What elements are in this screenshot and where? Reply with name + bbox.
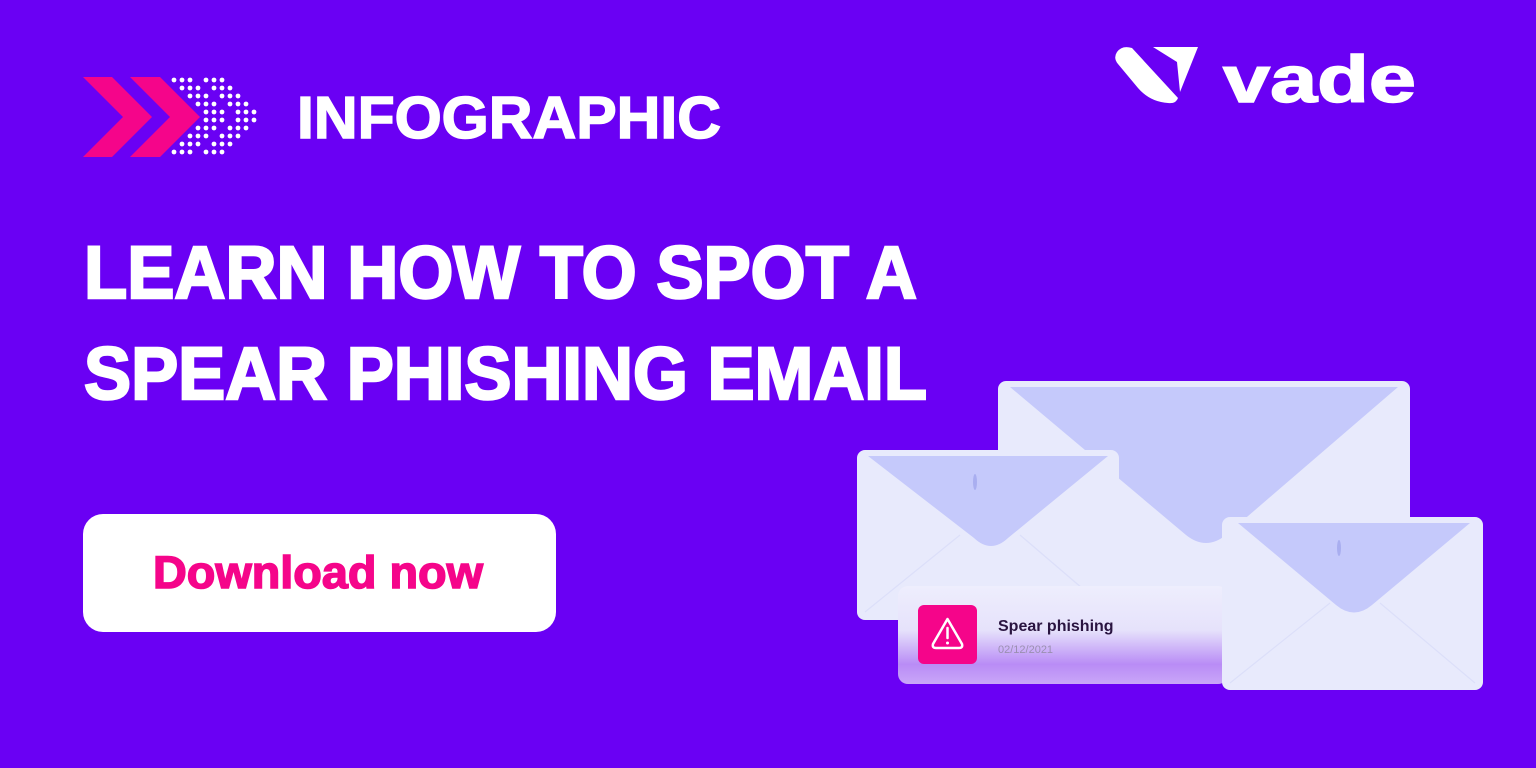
envelope: right xyxy=(1222,517,1483,690)
icon: warning xyxy=(918,605,977,664)
button: download now xyxy=(83,514,556,632)
illustration: envelopes xyxy=(857,381,1483,690)
notification card: Spear phishing xyxy=(998,618,1114,635)
headline: SPEAR PHISHING EMAIL xyxy=(84,332,927,415)
button: download now: Download now xyxy=(153,547,484,598)
logo: vade: vade xyxy=(1223,42,1416,116)
icon: chevrons with dots xyxy=(83,77,256,157)
envelope: large back xyxy=(998,381,1410,611)
headline xyxy=(84,231,927,415)
logo: vade xyxy=(1115,42,1416,116)
envelope: left xyxy=(857,450,1119,620)
label: INFOGRAPHIC: INFOGRAPHIC xyxy=(297,85,721,151)
notification card xyxy=(898,586,1228,684)
notification card: 02/12/2021 xyxy=(998,644,1053,656)
headline: LEARN HOW TO SPOT A xyxy=(84,231,917,314)
